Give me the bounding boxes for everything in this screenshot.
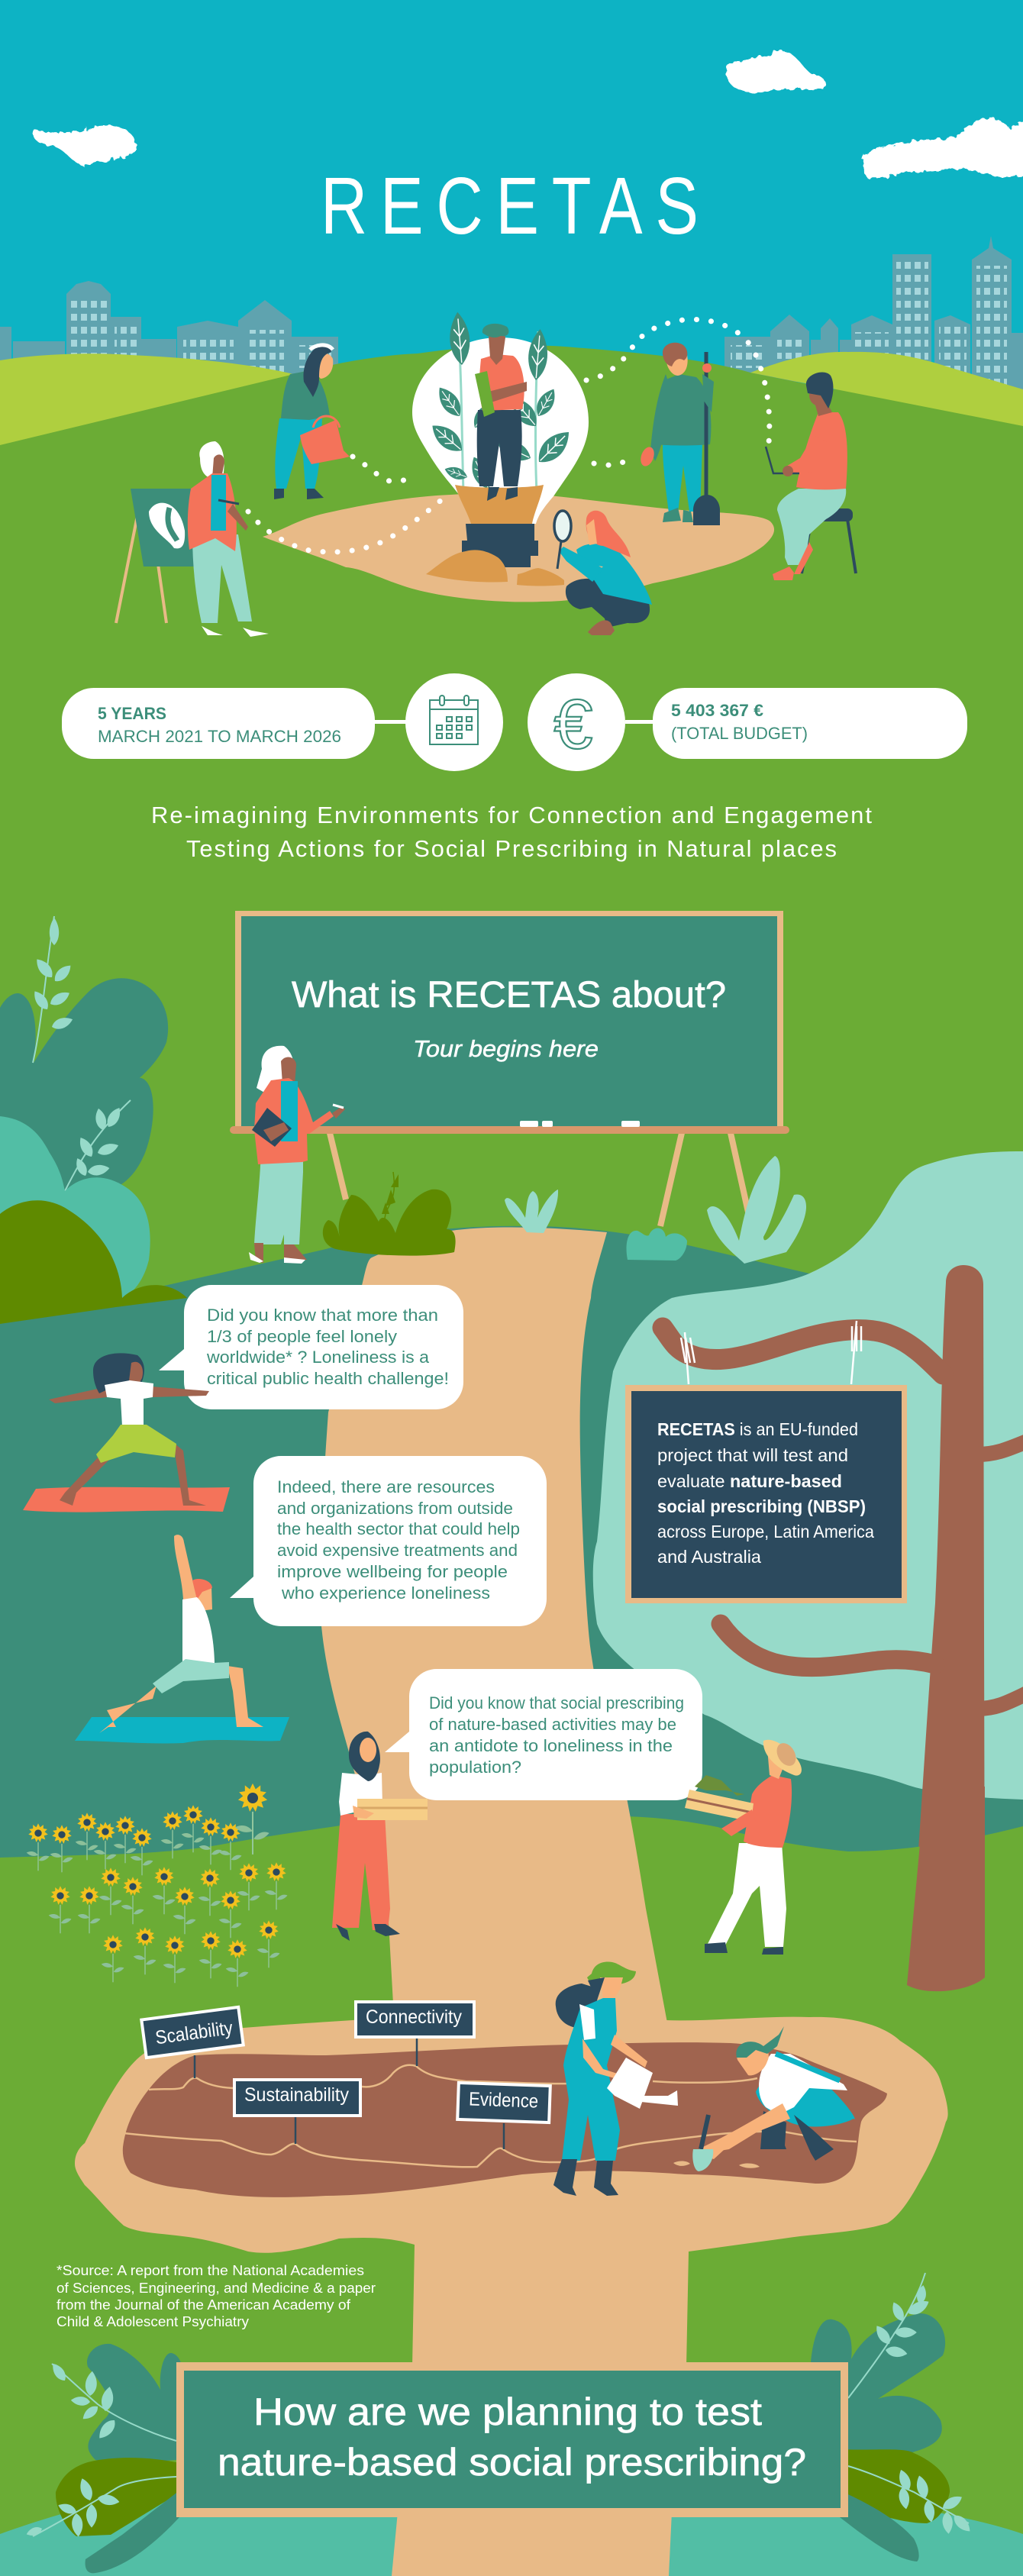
- speech bubble 1: Did you know that more than: [207, 1306, 438, 1325]
- yoga person 1: [49, 1353, 209, 1506]
- sign: scalability: [141, 2007, 244, 2058]
- person on bulb: [475, 324, 527, 501]
- dotted connector paths: [248, 319, 770, 552]
- bottom banner: nature-based social prescribing?: [218, 2441, 806, 2484]
- hill light left: [0, 353, 294, 445]
- euro icon circle: €: [553, 686, 593, 763]
- bottom banner: [176, 2362, 848, 2517]
- speech bubble 2: the health sector that could help: [277, 1519, 520, 1538]
- pot stand: [462, 524, 538, 567]
- hanging sign: across Europe, Latin America: [657, 1522, 874, 1541]
- speech bubble 3: Did you know that social prescribing: [429, 1693, 684, 1712]
- speech bubble 2: improve wellbeing for people: [277, 1562, 508, 1581]
- person watering: [274, 345, 350, 499]
- foliage left front: [0, 1116, 187, 1324]
- budget pill: (TOTAL BUDGET): [671, 724, 808, 743]
- speech bubble 2: avoid expensive treatments and: [277, 1541, 518, 1560]
- bottom foliage right: [811, 2273, 973, 2561]
- speech bubble 2: who experience loneliness: [281, 1583, 490, 1603]
- seeds: [673, 2161, 760, 2168]
- subtitle: [151, 802, 872, 862]
- person with magnifier: [554, 511, 652, 635]
- blackboard: [230, 911, 789, 1134]
- duration pill: [62, 688, 375, 759]
- yoga mat teal: [75, 1717, 289, 1743]
- branch lower: [721, 1624, 935, 1667]
- source note: of Sciences, Engineering, and Medicine & a paper: [56, 2281, 376, 2296]
- title: RECETAS: [321, 161, 712, 251]
- speech bubble 3: of nature-based activities may be: [429, 1715, 676, 1734]
- soil mound left: [426, 550, 508, 583]
- blackboard legs: [330, 1133, 749, 1226]
- cloud left: [33, 125, 136, 166]
- soil mound right: [517, 568, 564, 586]
- person with laptop on stool: [766, 373, 856, 580]
- person with shovel: [638, 343, 720, 525]
- sign: scalability: Scalability: [154, 2017, 234, 2048]
- tree trunk: [907, 1265, 985, 1991]
- plant mint tall: [707, 1156, 806, 1264]
- bottom foliage left: [25, 2344, 187, 2573]
- duration pill: 5 YEARS: [98, 704, 166, 723]
- duration pill: MARCH 2021 TO MARCH 2026: [98, 727, 341, 746]
- foliage left back: [0, 916, 168, 1206]
- blackboard: Tour begins here: [413, 1035, 599, 1062]
- cloud top right: [727, 50, 825, 92]
- sign: evidence: [457, 2083, 550, 2122]
- source note: Child & Adolescent Psychiatry: [56, 2314, 249, 2329]
- sand path bottom: [392, 2512, 672, 2576]
- hanging sign: project that will test and: [657, 1445, 848, 1465]
- trunk base over ground: [907, 1787, 985, 1991]
- speech bubble 2: and organizations from outside: [277, 1499, 513, 1518]
- connector left: [375, 720, 407, 724]
- person at easel: [116, 441, 269, 637]
- subtitle: Re-imagining Environments for Connection and Engagement: [151, 802, 872, 828]
- soil bed: [123, 2042, 887, 2197]
- budget pill: [653, 688, 967, 759]
- green lower ground: [0, 1816, 1023, 2576]
- big teal ground: [0, 1226, 1023, 1909]
- sunflowers: [27, 1784, 287, 1987]
- sand clearing: [263, 493, 774, 602]
- hill dark green: [0, 345, 1023, 534]
- sign: connectivity: [356, 2002, 474, 2037]
- hanging sign: social prescribing (NBSP): [657, 1496, 866, 1516]
- furrow lines: [124, 2065, 857, 2167]
- hanging sign: and Australia: [657, 1547, 761, 1567]
- speech bubble 1: critical public health challenge!: [207, 1369, 449, 1388]
- plant pot: [455, 485, 544, 524]
- skyline right: [724, 236, 1023, 405]
- person with hijab and crate: [332, 1732, 428, 1941]
- posts: [195, 2039, 504, 2149]
- yoga person 2: [99, 1535, 263, 1733]
- branch upper: [663, 1328, 943, 1374]
- subtitle: Testing Actions for Social Prescribing in Natural places: [186, 835, 837, 862]
- calendar icon circle: [405, 673, 503, 771]
- speech bubble 2: Indeed, there are resources: [277, 1477, 495, 1496]
- gardener standing: [553, 1962, 678, 2196]
- sand path lower overlap: [359, 1787, 669, 2031]
- speech bubble 3: [385, 1669, 702, 1800]
- gardener crouching: [692, 2026, 855, 2171]
- sky: [0, 0, 1023, 389]
- ropes: [681, 1321, 861, 1384]
- plant teal bush: [627, 1228, 687, 1261]
- sign: sustainability: [234, 2080, 360, 2116]
- source note: [56, 2263, 376, 2329]
- person with hat and crate: [685, 1740, 802, 1955]
- branch stubs right: [977, 1441, 1023, 1709]
- blackboard: What is RECETAS about?: [292, 975, 726, 1015]
- speech bubble 3: an antidote to loneliness in the: [429, 1736, 673, 1755]
- cloud right edge: [863, 118, 1023, 178]
- sign: evidence: Evidence: [469, 2088, 539, 2113]
- hanging sign: RECETAS is an EU-funded: [657, 1419, 858, 1439]
- sand path upper: [320, 1227, 669, 2031]
- speech bubble 1: worldwide* ? Loneliness is a: [206, 1348, 430, 1367]
- sand garden blob and lower path: [75, 1985, 948, 2367]
- speech bubble 2: [230, 1456, 547, 1626]
- hanging sign: [625, 1385, 907, 1603]
- shrub olive: [323, 1172, 456, 1256]
- person teacher: [249, 1046, 345, 1264]
- speech bubble 1: 1/3 of people feel lonely: [207, 1327, 397, 1346]
- speech bubble 1: [159, 1285, 463, 1409]
- bottom banner: How are we planning to test: [253, 2390, 762, 2433]
- sign: connectivity: Connectivity: [366, 2006, 462, 2028]
- mint tree canopy: [593, 1151, 1023, 1800]
- sign: sustainability: Sustainability: [244, 2084, 349, 2106]
- euro icon circle: [528, 673, 625, 771]
- hill light right: [750, 352, 1023, 426]
- speech bubble 3: population?: [429, 1758, 521, 1777]
- bottom teal ground: [0, 2489, 1023, 2576]
- connector right: [625, 720, 654, 724]
- plant mint small: [505, 1190, 558, 1233]
- yoga mat coral: [23, 1487, 230, 1512]
- source note: from the Journal of the American Academy of: [56, 2297, 351, 2313]
- hanging sign: evaluate nature-based: [657, 1471, 842, 1491]
- budget pill: 5 403 367 €: [671, 701, 763, 720]
- skyline left: [0, 281, 338, 382]
- source note: *Source: A report from the National Academies: [56, 2263, 364, 2278]
- lightbulb with plants: [412, 311, 589, 524]
